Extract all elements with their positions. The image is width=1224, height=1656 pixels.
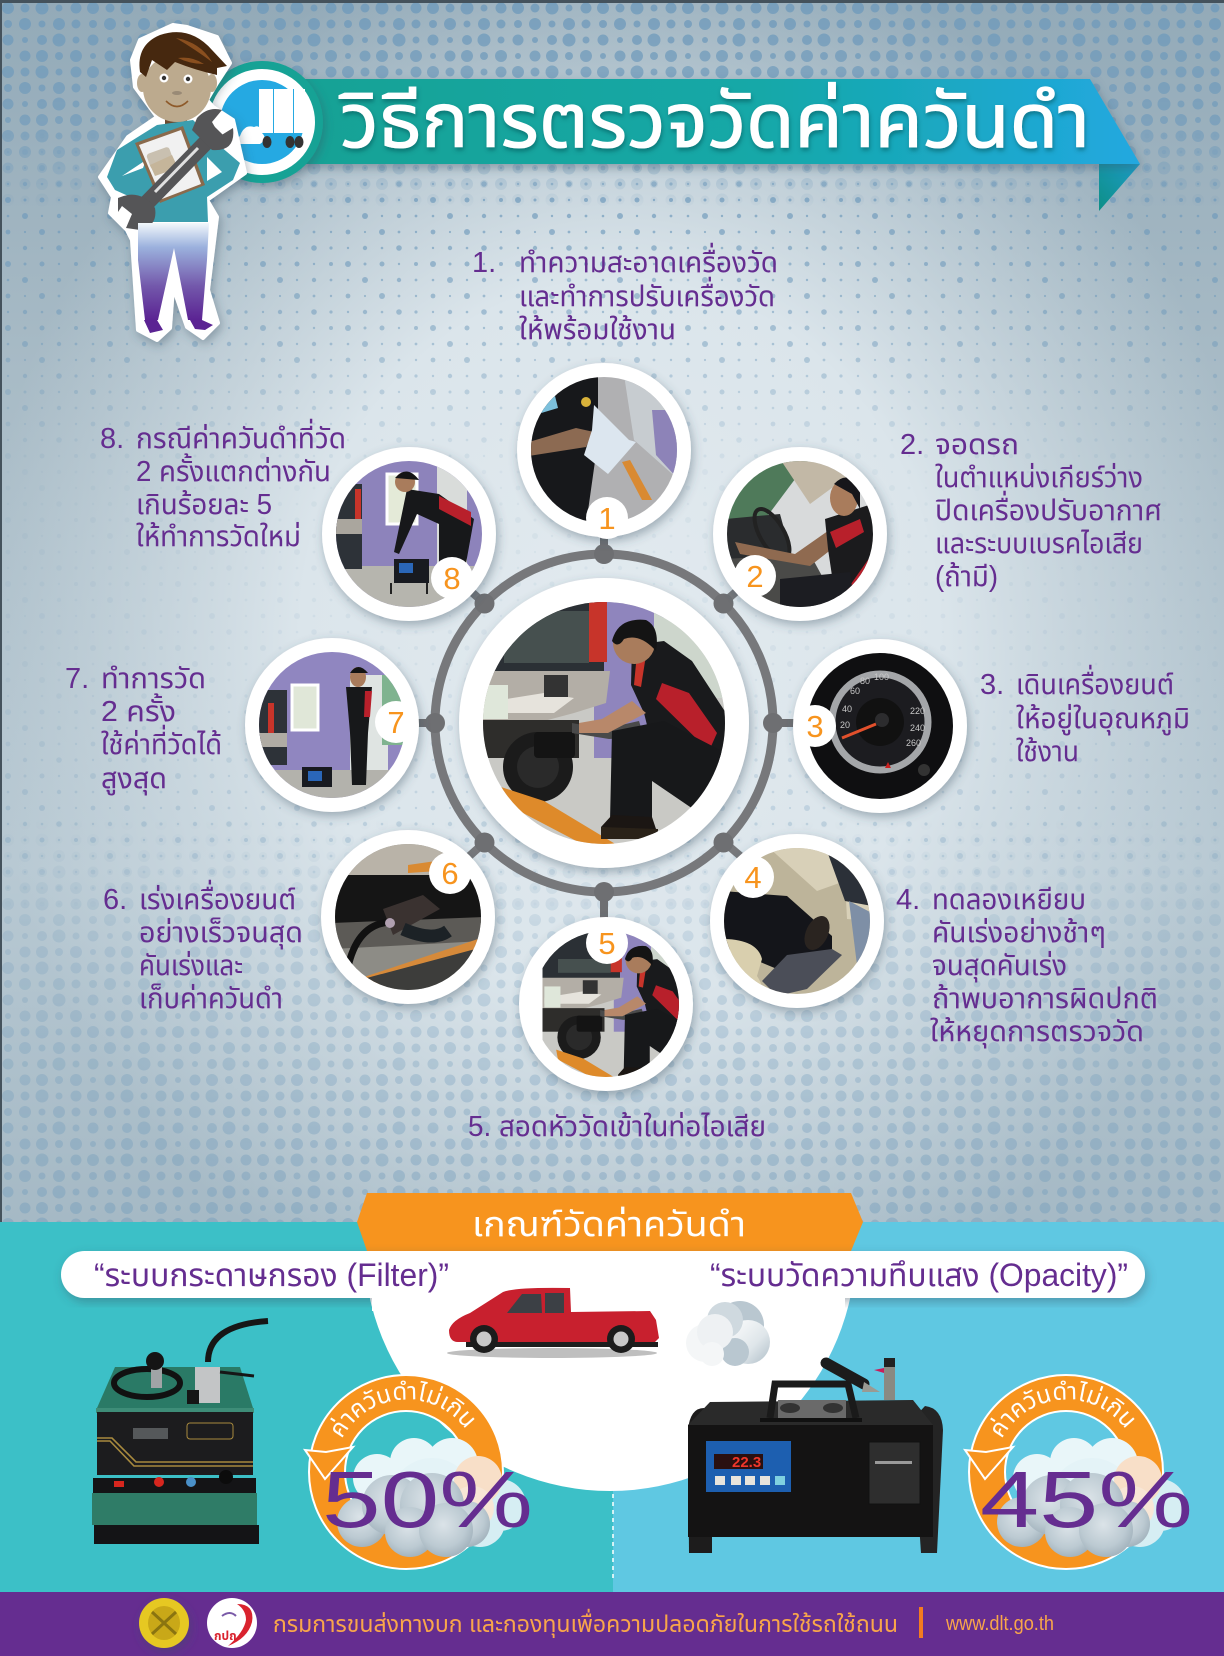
exhaust cloud bbox=[686, 1301, 770, 1366]
ribbon fold bbox=[1099, 164, 1140, 211]
photo 3: 100 bbox=[874, 672, 889, 682]
step 1 text: 1. bbox=[472, 247, 496, 279]
photo 7 bbox=[245, 638, 419, 812]
step 6 text: คันเร่งและ bbox=[139, 950, 243, 982]
panel background right bbox=[613, 1222, 1224, 1592]
step 8 text: ให้ทำการวัดใหม่ bbox=[136, 521, 301, 553]
gauge: filter limit 50%: ค่าควันดำไม่เกิน bbox=[330, 1380, 474, 1438]
number 6: 6 bbox=[441, 856, 459, 891]
step 7 text: 7. bbox=[65, 663, 89, 695]
number 1 bbox=[586, 497, 628, 539]
clipboard bbox=[135, 126, 205, 203]
step 3 text: ใช้งาน bbox=[1016, 736, 1079, 768]
step 5 text: 5. สอดหัววัดเข้าในท่อไอเสีย bbox=[468, 1111, 766, 1143]
step 1 text: และทำการปรับเครื่องวัด bbox=[519, 276, 775, 313]
step 2 text: (ถ้ามี) bbox=[935, 561, 998, 593]
step 8 text: เกินร้อยละ 5 bbox=[136, 489, 272, 521]
gauge: filter limit 50% bbox=[303, 1374, 533, 1570]
photo 5 bbox=[519, 917, 698, 1091]
step 1 text: ให้พร้อมใช้งาน bbox=[519, 314, 676, 346]
photo 8 bbox=[322, 447, 496, 621]
step 2 text bbox=[900, 429, 1162, 593]
step 6 text: 6. bbox=[103, 884, 127, 916]
head bbox=[143, 54, 211, 122]
shoes bbox=[144, 320, 213, 333]
photo 6 bbox=[321, 830, 495, 1004]
step 6 text: อย่างเร็วจนสุด bbox=[139, 917, 303, 949]
step 3 text bbox=[980, 664, 1190, 768]
footer bar bbox=[0, 1592, 1224, 1656]
step 8 text: 8. bbox=[100, 423, 124, 455]
step 2 text: ปิดเครื่องปรับอากาศ bbox=[935, 490, 1162, 527]
step 4 text: ถ้าพบอาการผิดปกติ bbox=[932, 983, 1158, 1015]
gauge: opacity limit 45%: 45% bbox=[980, 1455, 1193, 1544]
shirt bbox=[107, 120, 240, 222]
pants bbox=[138, 223, 209, 320]
step 6 text: เร่งเครื่องยนต์ bbox=[139, 879, 296, 916]
page background bbox=[0, 0, 1224, 1240]
title: วิธีการตรวจวัดค่าควันดำ bbox=[338, 79, 1090, 164]
wrench bbox=[118, 109, 233, 230]
step 4 text: คันเร่งอย่างช้าๆ bbox=[932, 917, 1106, 949]
number 5 bbox=[586, 922, 628, 964]
hand bbox=[150, 155, 178, 176]
opacity meter machine: 22.3 bbox=[732, 1454, 761, 1471]
step 7 text bbox=[65, 663, 222, 796]
gauge: opacity limit 45%: ค่าควันดำไม่เกิน bbox=[990, 1380, 1134, 1438]
number 1: 1 bbox=[598, 501, 616, 536]
photo 2 bbox=[713, 447, 887, 621]
photo 3: 240 bbox=[910, 723, 925, 733]
photo 3 bbox=[793, 639, 967, 813]
step 4 text: ทดลองเหยียบ bbox=[932, 884, 1086, 916]
step 8 text: 2 ครั้งแตกต่างกัน bbox=[136, 453, 331, 488]
panel background left bbox=[0, 1222, 613, 1592]
header banner bbox=[201, 61, 1140, 211]
step 1 text bbox=[472, 242, 778, 346]
face details bbox=[160, 74, 168, 82]
number 6 bbox=[429, 852, 471, 894]
organisation name: กรมการขนส่งทางบก และกองทุนเพื่อความปลอดภัยในการใช้รถใช้ถนน bbox=[273, 1608, 898, 1638]
center white bowl bbox=[370, 1298, 850, 1491]
step 3 text: ให้อยู่ในอุณหภูมิ bbox=[1016, 703, 1190, 736]
photo 3: 220 bbox=[910, 706, 925, 716]
step 6 text bbox=[103, 879, 303, 1015]
step 7 text: 2 ครั้ง bbox=[101, 693, 176, 728]
number 3: 3 bbox=[806, 709, 824, 744]
number 7: 7 bbox=[387, 705, 405, 740]
step 1 text: ทำความสะอาดเครื่องวัด bbox=[519, 242, 778, 279]
center photo bbox=[459, 578, 749, 868]
step 7 text: ใช้ค่าที่วัดได้ bbox=[101, 724, 222, 761]
ring and connectors bbox=[408, 532, 800, 918]
step 6 text: เก็บค่าควันดำ bbox=[139, 983, 283, 1015]
photo 3: 60 bbox=[850, 686, 860, 696]
step 2 text: จอดรถ bbox=[935, 429, 1019, 461]
step 3 text: เดินเครื่องยนต์ bbox=[1016, 664, 1174, 701]
logo: road safety fund bbox=[207, 1598, 257, 1648]
filter smoke tester machine bbox=[92, 1321, 268, 1544]
number 8: 8 bbox=[443, 561, 461, 596]
step 4 text bbox=[896, 884, 1158, 1048]
diagram: process ring bbox=[245, 363, 967, 1091]
number 8 bbox=[431, 557, 473, 599]
step 8 text bbox=[100, 418, 346, 553]
step 4 text: 4. bbox=[896, 884, 920, 916]
logo: department seal bbox=[139, 1598, 189, 1648]
number 2 bbox=[734, 555, 776, 597]
icon: truck badge bbox=[201, 61, 323, 183]
opacity meter machine bbox=[688, 1358, 943, 1553]
photo 3: 40 bbox=[842, 704, 852, 714]
red pickup truck bbox=[447, 1288, 659, 1358]
website: www.dlt.go.th bbox=[945, 1613, 1054, 1635]
photo 3: 20 bbox=[840, 720, 850, 730]
step 4 text: ให้หยุดการตรวจวัด bbox=[930, 1016, 1144, 1048]
step 4 text: จนสุดคันเร่ง bbox=[932, 950, 1067, 982]
filter system label: “ระบบกระดาษกรอง (Filter)” bbox=[94, 1257, 449, 1293]
step 7 text: สูงสุด bbox=[101, 763, 167, 796]
panel: smoke criteria bbox=[0, 1193, 1224, 1592]
gauge: opacity limit 45% bbox=[963, 1374, 1193, 1570]
ribbon bbox=[300, 79, 1140, 164]
step 2 text: ในตำแหน่งเกียร์ว่าง bbox=[935, 462, 1143, 494]
number 4: 4 bbox=[744, 860, 762, 895]
step 8 text: กรณีค่าควันดำที่วัด bbox=[136, 418, 346, 455]
number 4 bbox=[732, 856, 774, 898]
photo 1 bbox=[517, 363, 691, 537]
logo: road safety fund: กปถ. bbox=[214, 1629, 240, 1643]
photo 3: 80 bbox=[860, 676, 870, 686]
mascot: mechanic with wrench bbox=[100, 25, 245, 340]
number 5: 5 bbox=[598, 926, 616, 961]
criteria heading ribbon bbox=[357, 1193, 863, 1251]
photo 3: 260 bbox=[906, 738, 921, 748]
criteria heading ribbon: เกณฑ์วัดค่าควันดำ bbox=[472, 1205, 746, 1244]
step 7 text: ทำการวัด bbox=[101, 663, 206, 695]
neck bbox=[165, 112, 187, 128]
opacity system label: “ระบบวัดความทึบแสง (Opacity)” bbox=[710, 1257, 1128, 1293]
number 3 bbox=[794, 705, 836, 747]
step 2 text: 2. bbox=[900, 429, 924, 461]
ears bbox=[137, 74, 147, 92]
number 2: 2 bbox=[746, 559, 764, 594]
photo 4 bbox=[710, 834, 884, 1008]
gauge: filter limit 50%: 50% bbox=[322, 1455, 533, 1544]
label pill bbox=[61, 1251, 1145, 1311]
number 7 bbox=[375, 701, 417, 743]
step 2 text: และระบบเบรคไอเสีย bbox=[935, 528, 1143, 560]
hair bbox=[139, 32, 227, 77]
step 3 text: 3. bbox=[980, 669, 1004, 701]
